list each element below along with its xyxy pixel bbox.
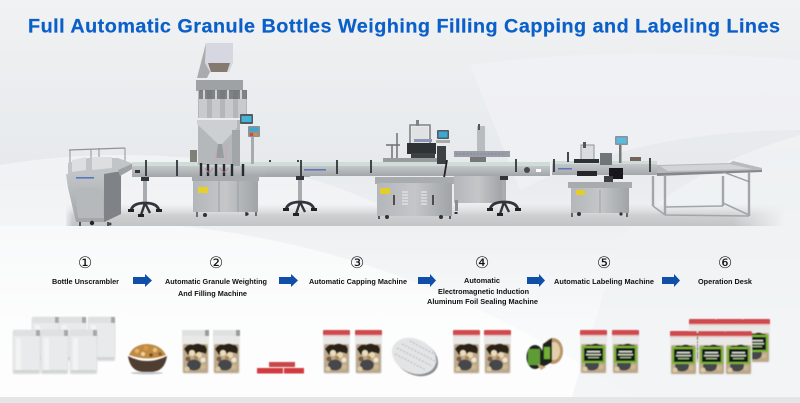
title: Full Automatic Granule Bottles Weighing Filling Capping and Labeling Lines: [28, 16, 780, 38]
step 5: number: ⑤: [597, 253, 611, 272]
machine: filler cabinet: [192, 176, 259, 217]
step 4: label: [427, 278, 538, 306]
conveyor: second section: [265, 159, 550, 176]
conveyor: first section: [132, 160, 310, 177]
empty bottles: [13, 317, 115, 374]
step 3: label: Automatic Capping Machine: [309, 279, 407, 286]
step 1: label: Bottle Unscrambler: [52, 279, 119, 286]
filled jars: [182, 330, 240, 374]
capped jars: [323, 330, 382, 374]
product row: [13, 317, 770, 383]
arrow 2: [279, 274, 298, 287]
step 4: label: Aluminum Foil Sealing Machine: [427, 299, 538, 306]
conveyor stand: [283, 176, 317, 216]
step 2: label: And Filling Machine: [178, 291, 247, 298]
machine: granule weighing and filling: [190, 43, 260, 166]
arrow 1: [133, 274, 152, 287]
step 4: number: ④: [475, 253, 489, 272]
finished jar group: [670, 319, 770, 375]
arrow 5: [662, 274, 680, 287]
machine: capping head: [383, 120, 450, 180]
red caps: [257, 362, 304, 374]
conveyor stand: [487, 176, 521, 216]
bowl of nuts: [128, 344, 167, 374]
step 3: number: ③: [350, 253, 364, 272]
capped jars before labeling: [453, 330, 511, 374]
step 6: label: Operation Desk: [698, 279, 752, 286]
step 5: label: Automatic Labeling Machine: [554, 279, 654, 286]
step 4: label: Electromagnetic Induction: [438, 289, 529, 296]
floor shadow: [66, 207, 776, 226]
conveyor stand: [128, 177, 162, 217]
machine: induction sealer: [454, 124, 510, 214]
machine: operation desk: [653, 161, 762, 216]
labeled jars: [580, 330, 639, 374]
arrow 4: [527, 274, 545, 287]
machine: capping cabinet: [375, 177, 454, 219]
step 2: label: Automatic Granule Weighting: [165, 279, 267, 286]
machine: labeling: [552, 136, 657, 217]
arrow 3: [418, 274, 436, 287]
machine: bottle unscrambler: [66, 148, 134, 226]
label rolls: [526, 338, 563, 370]
step 2: label: [165, 279, 267, 298]
step 6: number: ⑥: [718, 253, 732, 272]
machine: filler nozzle block: [192, 160, 262, 178]
production line machines: [66, 43, 762, 226]
step 1: number: ①: [78, 253, 92, 272]
step 2: number: ②: [209, 253, 223, 272]
step 4: label: Automatic: [464, 278, 500, 285]
aluminum foil seal: [386, 331, 444, 383]
